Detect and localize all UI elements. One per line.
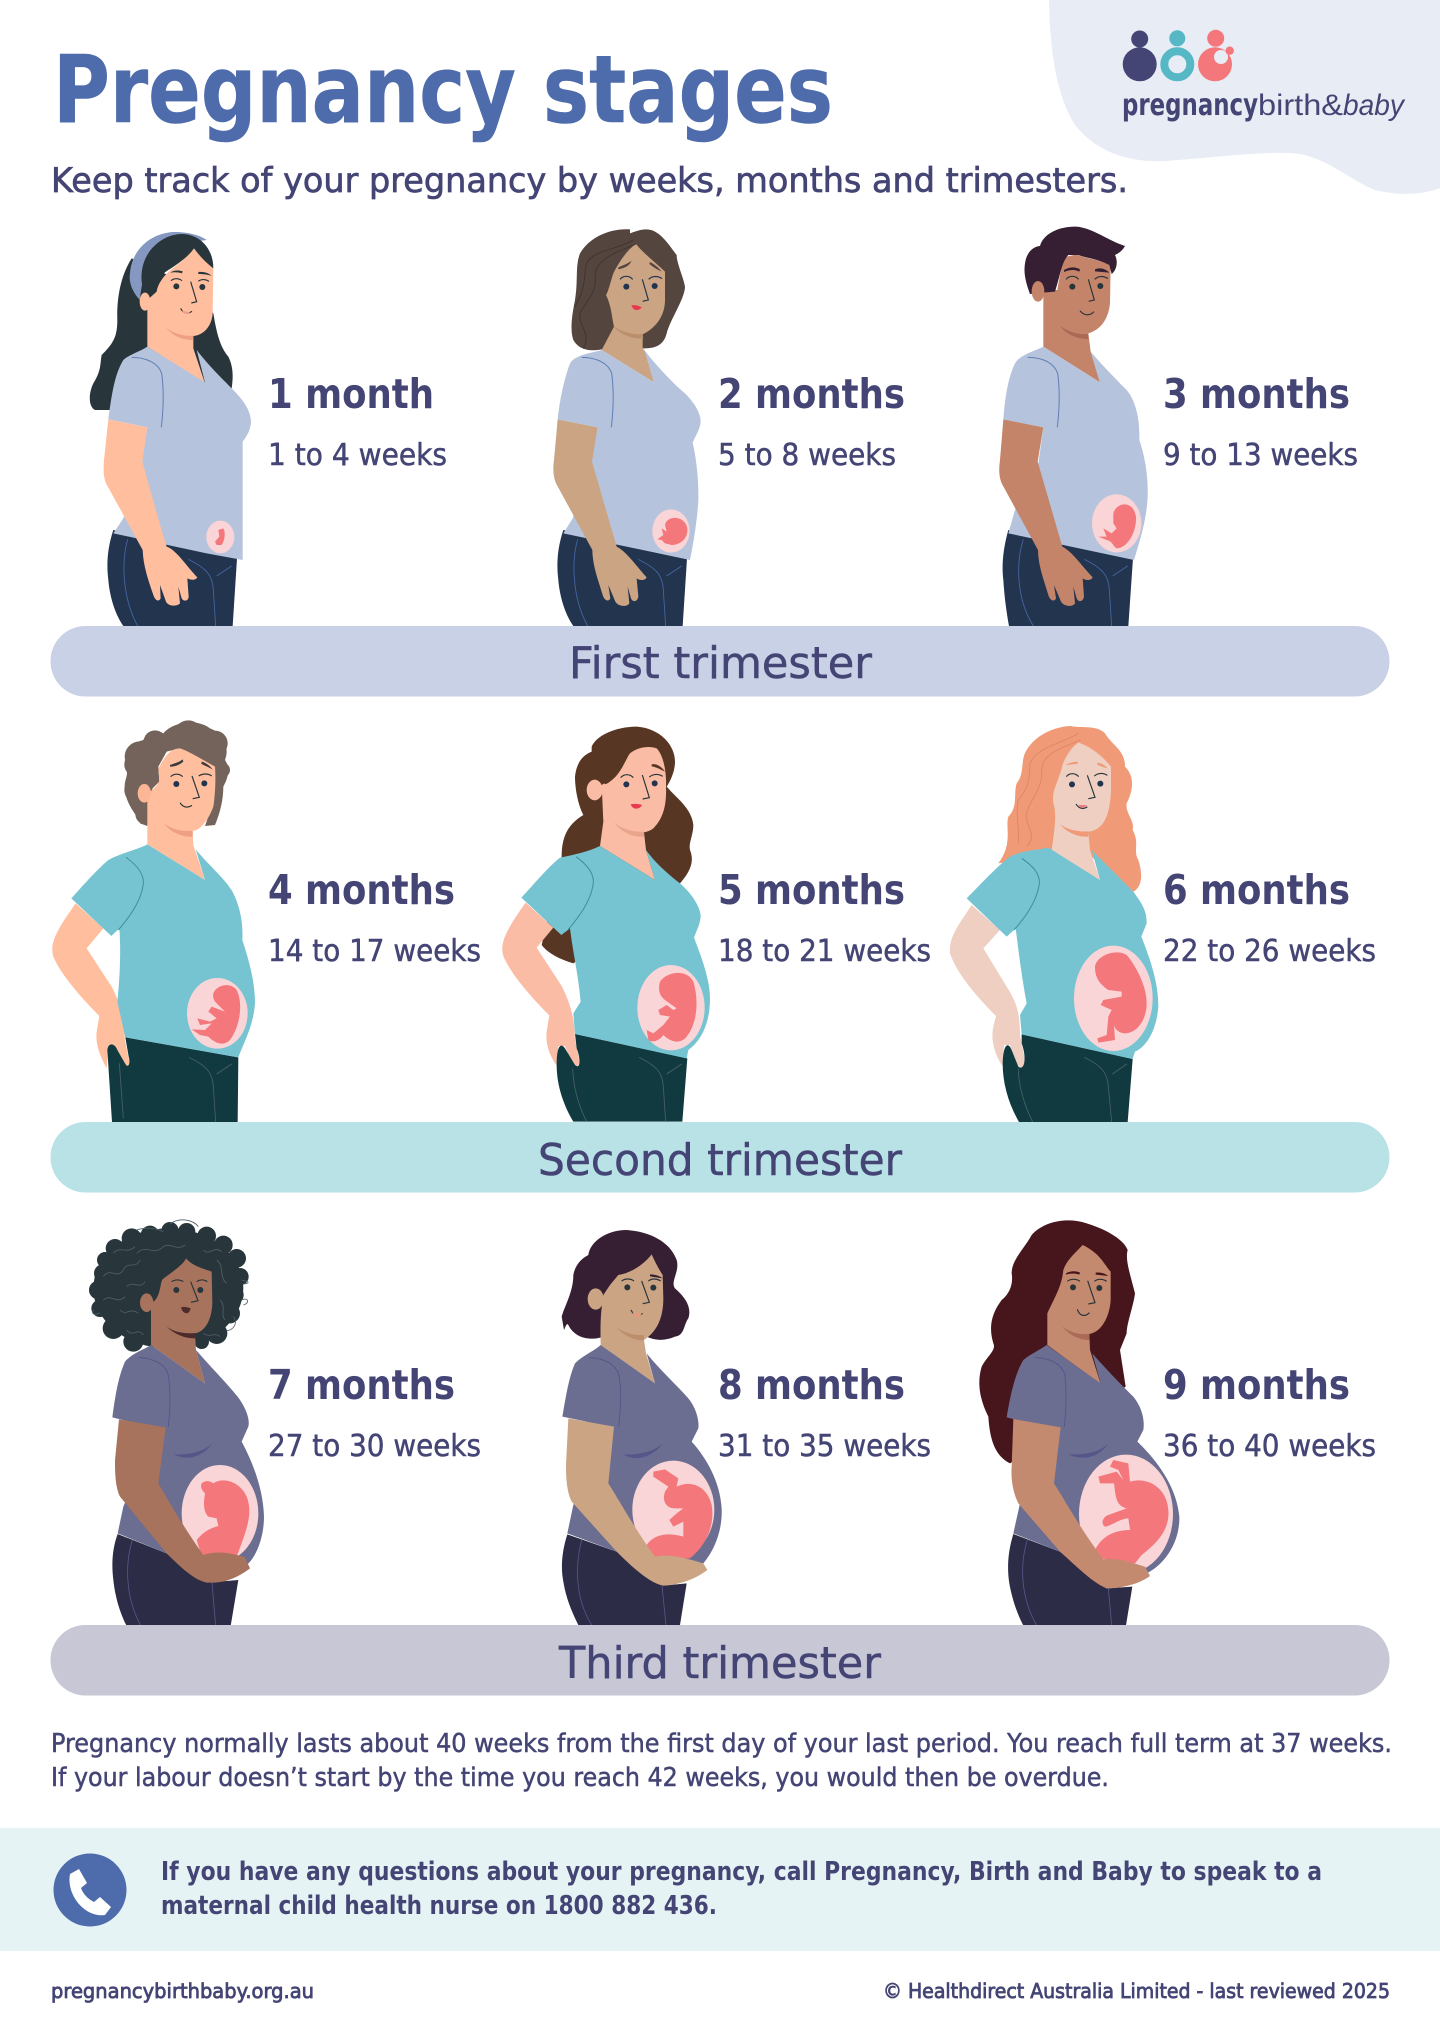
hair back xyxy=(90,258,233,410)
womb xyxy=(182,1465,258,1562)
pants seams xyxy=(573,1057,682,1122)
sleeve seam xyxy=(1035,1357,1066,1427)
pants seams xyxy=(1023,1540,1112,1625)
neck and face xyxy=(1047,1245,1111,1384)
hair strands xyxy=(1017,733,1081,847)
sleeve seam xyxy=(568,857,593,929)
fetus xyxy=(657,518,687,545)
neck and face xyxy=(602,244,665,382)
neck and face xyxy=(151,1258,212,1383)
chin shadow xyxy=(1060,824,1088,837)
figure: 3 months xyxy=(999,227,1148,626)
ear xyxy=(138,784,151,803)
chin shadow xyxy=(1060,326,1088,339)
shirt xyxy=(521,846,710,1058)
callout band xyxy=(0,1828,1440,1951)
womb xyxy=(187,978,248,1049)
womb xyxy=(1092,494,1141,552)
pants seams xyxy=(128,1540,216,1626)
pants xyxy=(557,1034,687,1122)
label: 8 months xyxy=(718,1361,931,1464)
fetus xyxy=(1095,1460,1168,1563)
face features xyxy=(622,1274,663,1317)
callout text line 2: maternal child health nurse on 1800 882 436. xyxy=(161,1891,717,1921)
months: 6 months xyxy=(1163,866,1350,914)
figure: 2 months xyxy=(553,229,701,626)
face features xyxy=(1066,762,1107,808)
months: 5 months xyxy=(718,866,905,914)
label: 7 months xyxy=(268,1361,481,1464)
figure: 1 month xyxy=(90,232,251,626)
footer website: pregnancybirthbaby.org.au xyxy=(51,1979,314,2003)
second trimester pill xyxy=(50,1122,1390,1192)
figure: 4 months xyxy=(52,720,255,1122)
pants seams xyxy=(124,539,232,626)
chin shadow xyxy=(614,822,644,837)
label: 2 months xyxy=(718,370,905,473)
sleeve seam xyxy=(132,357,163,427)
face features xyxy=(170,270,212,314)
months: 4 months xyxy=(268,866,455,914)
ear xyxy=(140,293,150,311)
shirt xyxy=(562,1345,722,1563)
icon: phone xyxy=(54,1854,126,1926)
pants xyxy=(1003,530,1133,626)
womb xyxy=(206,521,234,553)
pants xyxy=(107,1037,238,1122)
pants seams xyxy=(578,1540,666,1625)
label: 9 months xyxy=(1163,1361,1376,1464)
womb xyxy=(632,1461,714,1559)
breast shadow xyxy=(174,1443,212,1458)
months: 8 months xyxy=(718,1361,905,1409)
pill bar xyxy=(50,1122,1390,1192)
arm xyxy=(999,419,1093,606)
bangs xyxy=(604,747,633,784)
weeks: 27 to 30 weeks xyxy=(268,1429,481,1464)
pants seams xyxy=(574,539,682,626)
face features xyxy=(172,1280,207,1313)
label: 4 months xyxy=(268,866,481,969)
fetus xyxy=(215,528,225,545)
pants xyxy=(1003,1034,1133,1122)
figure: 5 months xyxy=(502,727,710,1122)
hair curls xyxy=(93,1220,248,1337)
paragraph xyxy=(51,1729,1392,1793)
third trimester pill xyxy=(50,1625,1390,1696)
logo xyxy=(1122,30,1406,123)
hair xyxy=(124,720,230,826)
paragraph: If your labour doesn’t start by the time you reach 42 weeks, you would then be overdue. xyxy=(51,1763,1109,1793)
months: 2 months xyxy=(718,370,905,418)
weeks: 9 to 13 weeks xyxy=(1163,438,1358,473)
fetus xyxy=(647,1469,712,1558)
arm xyxy=(502,903,579,1066)
face features xyxy=(621,764,665,809)
sleeve seam xyxy=(118,857,143,930)
pill text: Third trimester xyxy=(558,1638,882,1689)
weeks: 5 to 8 weeks xyxy=(718,438,896,473)
pill text: First trimester xyxy=(569,638,873,689)
pants seams xyxy=(1019,539,1128,626)
months: 1 month xyxy=(268,370,434,418)
hair strands xyxy=(575,240,636,348)
pants xyxy=(112,1534,238,1626)
shirt xyxy=(558,350,701,560)
fetus xyxy=(192,985,240,1044)
pill bar xyxy=(50,626,1390,696)
fetus xyxy=(647,973,697,1042)
pants xyxy=(107,530,237,626)
face features xyxy=(618,261,662,310)
band background xyxy=(0,1828,1440,1951)
chin shadow xyxy=(166,327,193,340)
arm xyxy=(104,419,197,606)
title: Pregnancy stages xyxy=(53,36,833,145)
sleeve seam xyxy=(582,357,613,427)
hair top xyxy=(141,234,213,292)
pants seams xyxy=(1018,1057,1127,1122)
shirt xyxy=(108,347,251,560)
logo icon: teal figure xyxy=(1164,30,1190,77)
logo icon: coral figure xyxy=(1198,30,1234,81)
label: 3 months xyxy=(1163,370,1358,473)
breast shadow xyxy=(623,1443,663,1458)
shirt xyxy=(1007,1345,1179,1573)
weeks: 31 to 35 weeks xyxy=(718,1429,931,1464)
months: 9 months xyxy=(1163,1361,1350,1409)
arm xyxy=(1011,1419,1150,1588)
months: 3 months xyxy=(1163,370,1350,418)
sleeve seam xyxy=(138,1357,170,1427)
logo wordmark: baby xyxy=(1343,89,1406,122)
pants xyxy=(557,530,687,626)
face features xyxy=(1064,267,1109,315)
breast shadow xyxy=(1068,1443,1108,1458)
fetus xyxy=(1095,952,1147,1043)
chin shadow xyxy=(1062,1327,1089,1340)
forehead curls xyxy=(158,1253,212,1282)
shirt xyxy=(967,848,1158,1059)
label: 1 month xyxy=(268,370,447,473)
chin shadow xyxy=(613,326,643,338)
womb xyxy=(1074,946,1153,1051)
arm xyxy=(553,419,647,606)
neck and face xyxy=(147,748,215,880)
hair xyxy=(1024,227,1125,294)
hair back xyxy=(542,727,693,963)
weeks: 22 to 26 weeks xyxy=(1163,934,1376,969)
ear xyxy=(588,1288,604,1310)
ear xyxy=(587,780,603,800)
subtitle: Keep track of your pregnancy by weeks, months and trimesters. xyxy=(51,161,1128,201)
arm xyxy=(115,1419,250,1583)
pill text: Second trimester xyxy=(538,1135,903,1186)
figure: 9 months xyxy=(979,1220,1179,1625)
chin shadow xyxy=(164,823,193,837)
logo wordmark: birth& xyxy=(1258,89,1343,122)
footer copyright: © Healthdirect Australia Limited - last reviewed 2025 xyxy=(883,1979,1390,2003)
hair xyxy=(979,1220,1135,1463)
fetus xyxy=(197,1480,249,1557)
womb xyxy=(652,509,690,553)
logo wordmark: pregnancy xyxy=(1122,88,1258,123)
curly hair xyxy=(89,1222,249,1352)
pants seams xyxy=(119,1057,232,1122)
shirt xyxy=(112,1345,264,1565)
sleeve seam xyxy=(589,1358,621,1427)
neck and face xyxy=(1043,254,1111,382)
hair xyxy=(572,229,685,350)
face features xyxy=(170,759,213,807)
arm xyxy=(52,903,129,1068)
pants xyxy=(562,1534,687,1625)
ear xyxy=(140,1293,153,1312)
neck and face xyxy=(600,747,666,880)
first trimester pill xyxy=(50,626,1390,696)
pill bar xyxy=(50,1625,1390,1696)
hair xyxy=(998,726,1141,892)
arm xyxy=(566,1418,707,1586)
months: 7 months xyxy=(268,1361,455,1409)
header blob xyxy=(1049,0,1440,194)
shirt xyxy=(71,844,255,1057)
ear xyxy=(1032,281,1044,302)
shirt xyxy=(1003,347,1148,560)
neck and face xyxy=(601,1254,663,1383)
weeks: 1 to 4 weeks xyxy=(268,438,447,473)
sleeve seam xyxy=(1028,357,1059,427)
weeks: 14 to 17 weeks xyxy=(268,934,481,969)
hairband xyxy=(130,232,207,300)
figure: 6 months xyxy=(950,726,1158,1122)
neck and face xyxy=(147,248,213,383)
pants xyxy=(1008,1534,1132,1625)
sleeve seam xyxy=(1014,858,1039,930)
figure: 7 months xyxy=(89,1220,264,1626)
arm xyxy=(950,905,1025,1067)
face features xyxy=(1066,1271,1108,1315)
chin shadow xyxy=(167,1327,196,1338)
logo icon: dark figure xyxy=(1123,30,1157,81)
chin shadow xyxy=(616,1327,644,1340)
label: 5 months xyxy=(718,866,931,969)
fetus xyxy=(1098,504,1136,548)
womb xyxy=(1079,1455,1173,1573)
label: 6 months xyxy=(1163,866,1376,969)
hair xyxy=(562,1230,689,1340)
weeks: 36 to 40 weeks xyxy=(1163,1429,1376,1464)
weeks: 18 to 21 weeks xyxy=(718,934,931,969)
figure: 8 months xyxy=(562,1230,722,1625)
neck and face xyxy=(1052,742,1111,880)
womb xyxy=(637,965,705,1050)
